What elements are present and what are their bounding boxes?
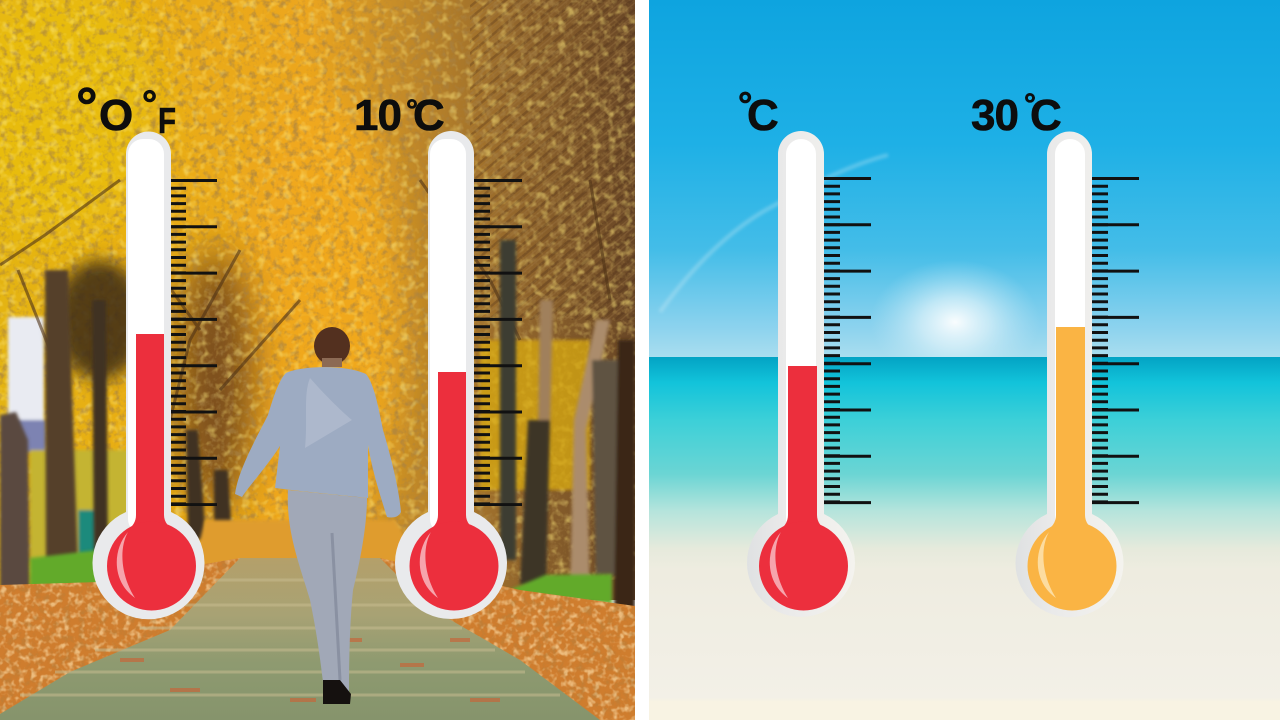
white tube: [430, 139, 466, 534]
sand: [649, 570, 1280, 720]
scale ticks: [832, 177, 848, 506]
walkway: [0, 558, 600, 720]
glass body: [93, 132, 204, 619]
jacket highlight: [305, 378, 352, 448]
glass body: [1016, 132, 1124, 617]
tree trunks: [0, 240, 635, 620]
faint rainbow: [660, 155, 888, 312]
label: 10°C: 10: [354, 91, 401, 140]
liquid level: [1044, 327, 1098, 540]
distant sky and background behind trees: [8, 317, 590, 560]
sky: [649, 0, 1280, 358]
label: °C: C: [747, 91, 779, 140]
shoes: [323, 680, 351, 704]
label: °C: [738, 84, 779, 140]
label: 30°C: °: [1024, 88, 1036, 121]
fallen leaves ground: [0, 556, 635, 720]
label: 0°F: O: [99, 91, 133, 140]
label: 0°F: °: [142, 84, 157, 126]
bulb highlight: [420, 532, 438, 598]
scale ticks: [482, 179, 498, 506]
bulb highlight: [770, 532, 788, 598]
bulb: [410, 522, 498, 610]
head: [314, 327, 350, 365]
scattered leaves on walkway: [120, 640, 500, 700]
thermometer: 10°C on autumn panel: [354, 91, 507, 619]
glass body: [395, 131, 507, 619]
liquid level: [776, 366, 830, 540]
bare branches: [0, 180, 610, 420]
trousers: [288, 490, 367, 692]
neck: [322, 358, 342, 367]
sun glow: [880, 264, 1030, 357]
bulb: [759, 522, 848, 610]
label: 30°C: [971, 88, 1062, 140]
label: 30°C: 30: [971, 91, 1018, 140]
label: 0°F: F: [158, 100, 176, 141]
jacket: [235, 367, 401, 517]
liquid level: [124, 334, 178, 540]
panel: autumn park photo: [0, 0, 635, 720]
thermometer: 0°F on autumn panel: [76, 77, 204, 619]
autumn foliage background: [0, 0, 635, 600]
golden path behind walker: [198, 518, 404, 564]
sea: [649, 357, 1280, 570]
label: 30°C: C: [1030, 91, 1062, 140]
tree canopy shadow: [55, 260, 145, 380]
liquid level: [426, 372, 480, 540]
thermometer: 30°C on beach panel: [971, 88, 1124, 617]
white tube: [1055, 139, 1085, 534]
label: 10°C: [354, 91, 445, 140]
thermometer: °C on beach panel: [738, 84, 855, 617]
panel: beach photo: [649, 0, 1280, 720]
label: 0°F: [76, 77, 176, 141]
walkway bands: [20, 580, 560, 695]
white tube: [128, 139, 164, 534]
person walking: [235, 327, 401, 704]
scale ticks: [1100, 177, 1116, 506]
bulb highlight: [1038, 532, 1056, 598]
glass body: [747, 131, 855, 617]
bulb highlight: [117, 532, 135, 598]
bulb: [1028, 522, 1116, 610]
label: °C: °: [738, 84, 752, 125]
label: 0°F: °: [76, 77, 98, 137]
bulb: [107, 522, 196, 610]
white tube: [786, 139, 816, 534]
grass patches: [30, 550, 612, 604]
label: 10°C: °: [406, 94, 418, 127]
scale ticks: [178, 179, 194, 506]
trouser leg crease: [332, 533, 340, 680]
label: 10°C: C: [413, 91, 445, 140]
